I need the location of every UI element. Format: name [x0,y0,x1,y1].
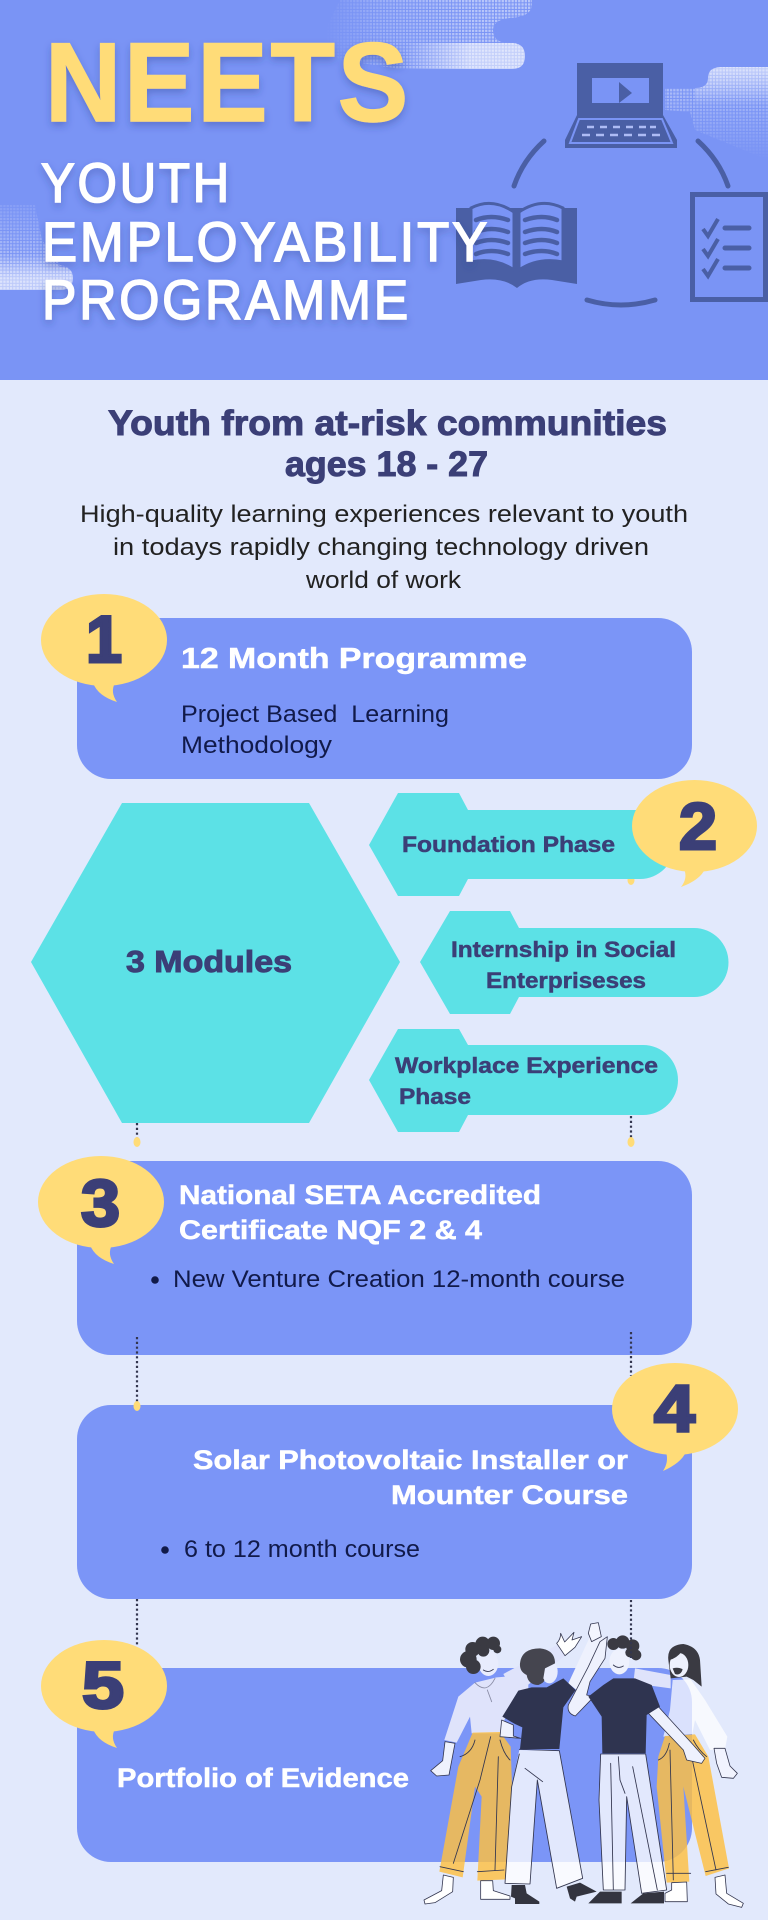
step 1 text: Project Based Learning [181,701,449,728]
step 1 text: Methodology [181,732,332,759]
panel: 3 modules hexagon: 3 Modules [126,944,292,979]
badge 3 [38,1156,164,1264]
icon: laptop [565,63,677,148]
illustration: group of four people high-fiving [424,1600,743,1907]
step 3 text [151,1180,625,1293]
step 4 text: Solar Photovoltaic Installer or [193,1445,629,1475]
icon: cycle arcs [514,141,728,305]
module: foundation phase: Foundation Phase [402,832,615,857]
connector: step 3 to 4 [137,1332,631,1402]
panel: step 5 [41,1640,692,1862]
person 1 [424,1632,582,1904]
heading: audience: Youth from at-risk communities [108,404,667,443]
badge 4: 4 [654,1371,695,1445]
icon: open book [456,203,577,288]
badge 4 [612,1363,738,1471]
connector over person 3 [628,1600,634,1658]
module: foundation phase [369,793,674,896]
cloud: left [0,205,73,290]
module: internship: Enterpriseses [486,968,646,993]
step 3 text: National SETA Accredited [179,1180,541,1210]
module: internship: Internship in Social [451,937,676,962]
subtitle [41,151,490,331]
badge 5 [41,1640,167,1748]
connector: step 4 to 5 [136,1599,138,1647]
text block: description: High-quality learning experiences relevant to youth [80,501,688,528]
badge 1: 1 [86,602,122,676]
module: workplace: Workplace Experience [395,1053,658,1078]
icon: checklist [692,194,766,300]
header banner [0,0,768,380]
panel: step 1 [41,594,692,779]
text block: description: world of work [305,567,462,594]
curly hair [607,1635,641,1660]
step 4 text: 6 to 12 month course [184,1536,420,1563]
badge 2 [632,780,757,887]
step 1 text: 12 Month Programme [181,643,527,675]
module: internship [420,911,728,1014]
text block: description [80,501,688,594]
step 3 text: Certificate NQF 2 & 4 [179,1215,482,1245]
subtitle: PROGRAMME [42,268,411,331]
cloud: top centre [320,0,532,69]
person 2 [500,1623,603,1904]
panel: 3 modules hexagon [31,803,400,1123]
panel: step 3 [38,1156,692,1355]
badge 5: 5 [82,1648,124,1722]
heading: audience [108,404,667,484]
person 3 [568,1635,705,1903]
connector dots [134,875,634,1147]
step 4 text: Mounter Course [391,1480,628,1510]
curly hair [460,1637,501,1674]
cloud: top right [665,67,768,147]
module: workplace [369,1029,678,1132]
badge 3: 3 [81,1166,120,1240]
text block: description: in todays rapidly changing technology driven [113,534,649,561]
badge 1 [41,594,167,702]
subtitle: EMPLOYABILITY [42,210,490,273]
step 3 text: New Venture Creation 12-month course [173,1266,625,1293]
step 4 text [161,1445,629,1563]
step 5 text: Portfolio of Evidence [117,1763,409,1793]
badge 2: 2 [679,789,717,863]
step 1 text [181,643,527,759]
person 4 [633,1644,743,1907]
panel: step 4 [77,1363,738,1599]
module: workplace: Phase [399,1084,471,1109]
heading: audience: ages 18 - 27 [285,445,488,484]
subtitle: YOUTH [41,151,232,214]
title: NEETS: NEETS [45,20,411,145]
